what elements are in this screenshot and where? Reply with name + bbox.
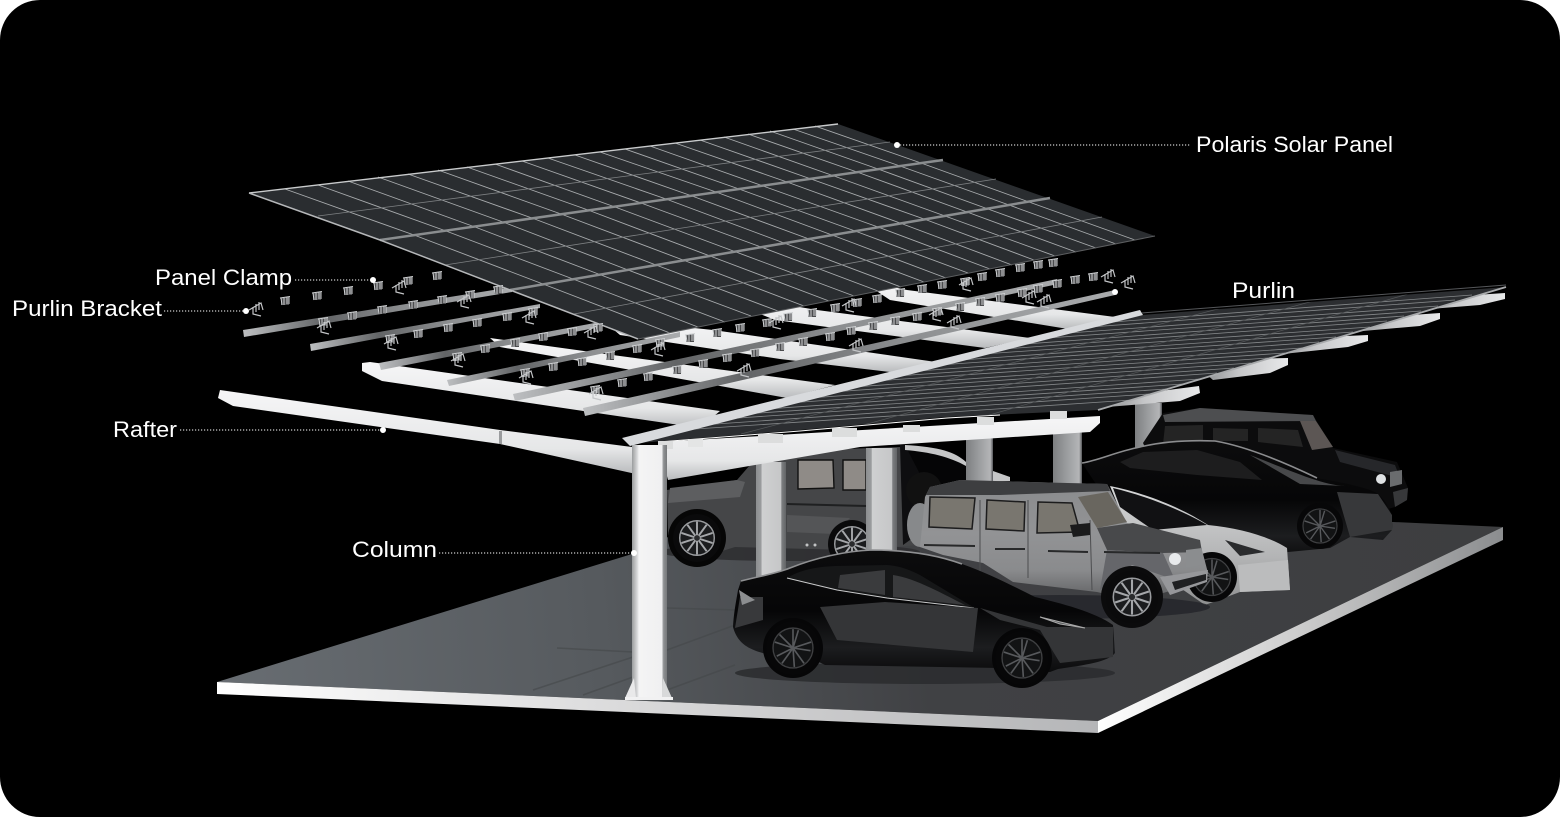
- label: Purlin Bracket: Purlin Bracket: [12, 296, 162, 321]
- exploded solar panel: [249, 124, 1155, 339]
- mounted purlin edge: [622, 310, 1143, 446]
- label: Purlin: [1112, 278, 1295, 303]
- label: Rafter: [113, 417, 386, 442]
- rear columns: [966, 403, 1162, 491]
- mid columns: [756, 448, 897, 577]
- label: Column: [352, 537, 637, 562]
- label: Column: Column: [352, 537, 437, 562]
- front rafter: [658, 411, 1100, 480]
- label: Purlin Bracket: [12, 296, 249, 321]
- label: Polaris Solar Panel: Polaris Solar Panel: [1196, 132, 1393, 157]
- label: Panel Clamp: [155, 265, 376, 290]
- ground slab: [217, 520, 1503, 733]
- car: black SUV rear: [1143, 408, 1408, 520]
- left rafter: [218, 390, 636, 474]
- label: Polaris Solar Panel: [894, 132, 1393, 157]
- label: Rafter: Rafter: [113, 417, 177, 442]
- car: silver SUV: [907, 480, 1210, 628]
- right-side rafters under mounted panel: [1090, 293, 1505, 407]
- exploded rafters: [362, 280, 1115, 428]
- car: white sedan: [1110, 486, 1290, 605]
- car: dark SUV: [660, 445, 1010, 568]
- car: black sedan front: [733, 550, 1115, 688]
- mounted solar panel: [640, 285, 1506, 443]
- car: black sedan: [1082, 441, 1392, 560]
- main column: [625, 445, 673, 700]
- label: Purlin: Purlin: [1232, 278, 1295, 303]
- panel clamps and purlin brackets: [249, 258, 1135, 400]
- exploded purlins: [243, 279, 1115, 416]
- label: Panel Clamp: Panel Clamp: [155, 265, 292, 290]
